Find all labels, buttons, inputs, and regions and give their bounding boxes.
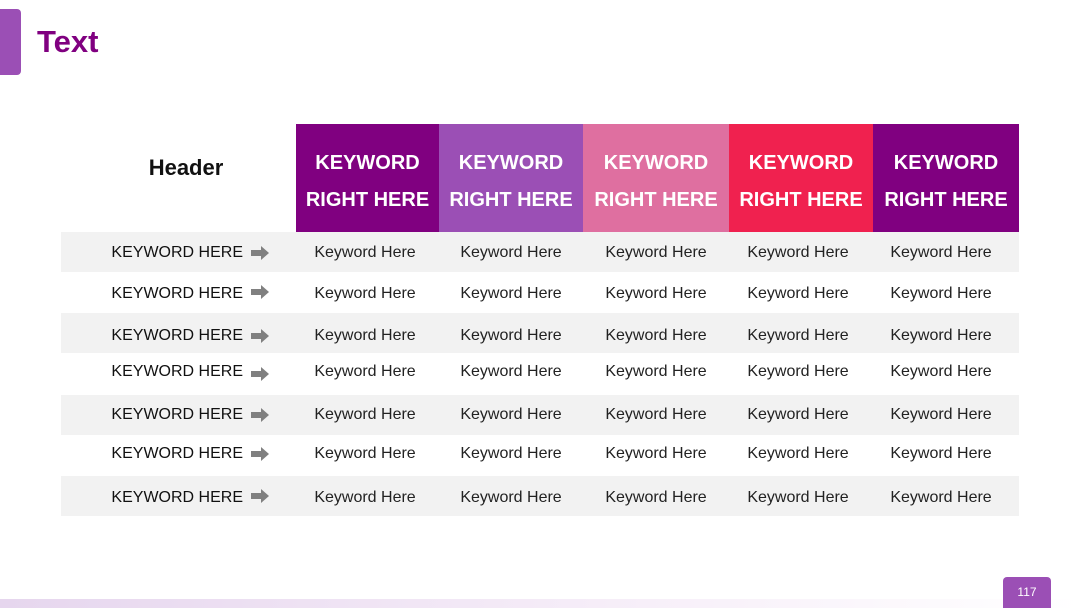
table body rows: Keyword Here <box>314 363 416 380</box>
table body rows: Keyword Here <box>460 244 562 261</box>
column header 2 <box>439 124 583 233</box>
table body rows: Keyword Here <box>460 285 562 302</box>
table body rows: KEYWORD HERE <box>111 406 243 423</box>
table body rows: Keyword Here <box>747 406 849 423</box>
column header 1: RIGHT HERE <box>306 189 429 211</box>
column header 4: RIGHT HERE <box>739 189 863 211</box>
column header 3: KEYWORD <box>604 152 708 174</box>
table body rows: KEYWORD HERE <box>111 285 243 302</box>
column header 5: KEYWORD <box>894 152 998 174</box>
table body rows: Keyword Here <box>605 285 707 302</box>
table body rows: Keyword Here <box>605 406 707 423</box>
table body rows: Keyword Here <box>890 285 992 302</box>
column header 3 <box>583 124 729 233</box>
table body rows: Keyword Here <box>605 489 707 506</box>
table body rows: Keyword Here <box>460 445 562 462</box>
table body rows: Keyword Here <box>314 489 416 506</box>
table body rows: Keyword Here <box>747 244 849 261</box>
table body rows: Keyword Here <box>605 244 707 261</box>
table body rows: Keyword Here <box>890 327 992 344</box>
table body rows: Keyword Here <box>747 285 849 302</box>
column header 5 <box>873 124 1019 233</box>
column header 2: KEYWORD <box>459 152 563 174</box>
table body rows: Keyword Here <box>605 363 707 380</box>
column header 1 <box>296 124 439 233</box>
table body rows: Keyword Here <box>605 327 707 344</box>
column header 5: RIGHT HERE <box>884 189 1008 211</box>
table body rows: Keyword Here <box>460 363 562 380</box>
table body rows: Keyword Here <box>890 445 992 462</box>
bottom gradient strip <box>0 599 1080 608</box>
table body rows: Keyword Here <box>314 285 416 302</box>
table body rows: Keyword Here <box>747 327 849 344</box>
table body rows: Keyword Here <box>314 327 416 344</box>
column header 3: RIGHT HERE <box>594 189 718 211</box>
table body rows: Keyword Here <box>314 445 416 462</box>
table body rows: KEYWORD HERE <box>111 489 243 506</box>
row header label: Header <box>149 155 223 180</box>
table body rows: Keyword Here <box>747 363 849 380</box>
table body rows: Keyword Here <box>460 406 562 423</box>
title: Text <box>37 24 98 59</box>
table body rows: Keyword Here <box>890 489 992 506</box>
table body rows: Keyword Here <box>605 445 707 462</box>
table body rows: Keyword Here <box>890 244 992 261</box>
table body rows: KEYWORD HERE <box>111 327 243 344</box>
table body rows: Keyword Here <box>890 363 992 380</box>
table body rows: Keyword Here <box>460 327 562 344</box>
table body rows: Keyword Here <box>747 445 849 462</box>
column header 2: RIGHT HERE <box>449 189 573 211</box>
page number badge <box>1003 577 1051 608</box>
table body rows: KEYWORD HERE <box>111 445 243 462</box>
title accent bar <box>0 9 21 75</box>
page number badge: 117 <box>1017 585 1037 599</box>
table body rows: KEYWORD HERE <box>111 244 243 261</box>
column header 4 <box>729 124 873 233</box>
table body rows: Keyword Here <box>747 489 849 506</box>
table body rows: Keyword Here <box>314 406 416 423</box>
table body rows: Keyword Here <box>890 406 992 423</box>
table body rows: KEYWORD HERE <box>111 363 243 380</box>
table body rows: Keyword Here <box>314 244 416 261</box>
column header 4: KEYWORD <box>749 152 853 174</box>
table body rows: Keyword Here <box>460 489 562 506</box>
column header 1: KEYWORD <box>315 152 420 174</box>
